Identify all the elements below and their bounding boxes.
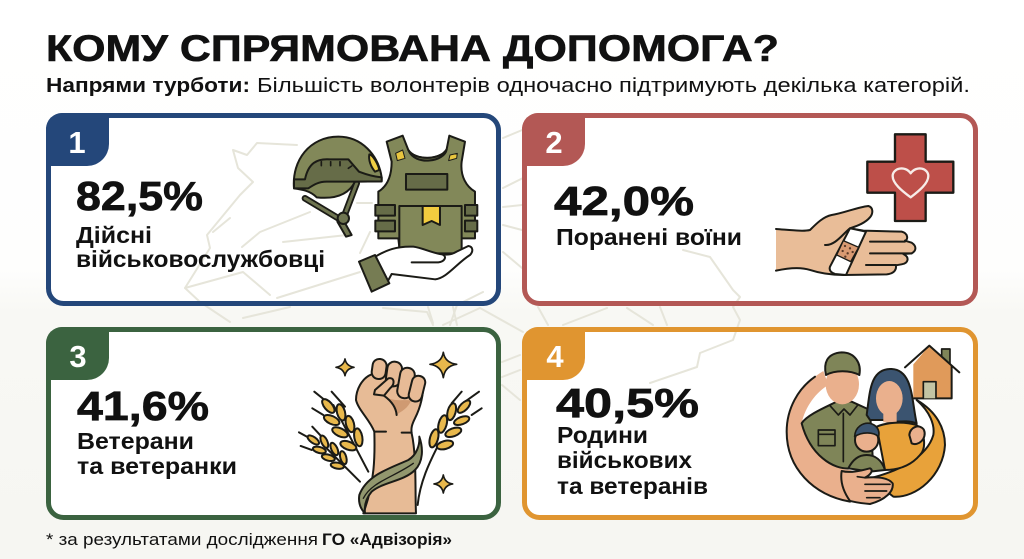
footnote: ГО «Адвізорія»	[322, 531, 452, 549]
stat 40,5%: 40,5%	[556, 380, 699, 426]
label military: військовослужбовці	[76, 246, 325, 272]
icon: helmet, vest and hand	[294, 136, 477, 292]
map of Ukraine background	[185, 128, 740, 400]
subtitle: Напрями турботи:	[46, 75, 250, 97]
badge 1: 1	[68, 125, 86, 160]
stat 82,5%: 82,5%	[76, 173, 203, 219]
icon: family with house	[787, 346, 959, 504]
icon: medical cross and bandaged hand	[776, 134, 953, 275]
label families: військових	[557, 447, 692, 473]
panel: card 4 families	[522, 327, 976, 518]
badge 2	[522, 113, 585, 166]
badge 3	[46, 327, 109, 380]
label wounded: Поранені воїни	[556, 224, 742, 250]
badge 1	[46, 113, 109, 166]
stat 41,6%: 41,6%	[77, 383, 209, 429]
label families: Родини	[557, 422, 648, 448]
subtitle	[46, 75, 970, 97]
label veterans	[77, 428, 237, 479]
label military	[76, 222, 325, 272]
card fills	[48, 115, 976, 518]
label military: Дійсні	[76, 222, 152, 248]
footnote	[46, 531, 452, 549]
panel: card 1 military	[46, 113, 498, 304]
stat 42,0%: 42,0%	[554, 178, 694, 224]
panel: card 3 veterans	[46, 327, 498, 518]
label families: та ветеранів	[557, 473, 708, 499]
panel: card 2 wounded	[522, 113, 976, 304]
footnote: * за результатами дослідження	[46, 531, 318, 549]
subtitle: Більшість волонтерів одночасно підтримують декілька категорій.	[257, 75, 970, 97]
badge 4: 4	[546, 339, 564, 374]
label veterans: Ветерани	[77, 428, 194, 454]
badge 2: 2	[545, 125, 563, 160]
title: КОМУ СПРЯМОВАНА ДОПОМОГА?	[46, 28, 779, 69]
badge 3: 3	[69, 339, 87, 374]
label families	[557, 422, 708, 499]
label veterans: та ветеранки	[77, 453, 237, 479]
icon: raised fist with wheat	[299, 352, 482, 513]
badge 4	[522, 327, 585, 380]
